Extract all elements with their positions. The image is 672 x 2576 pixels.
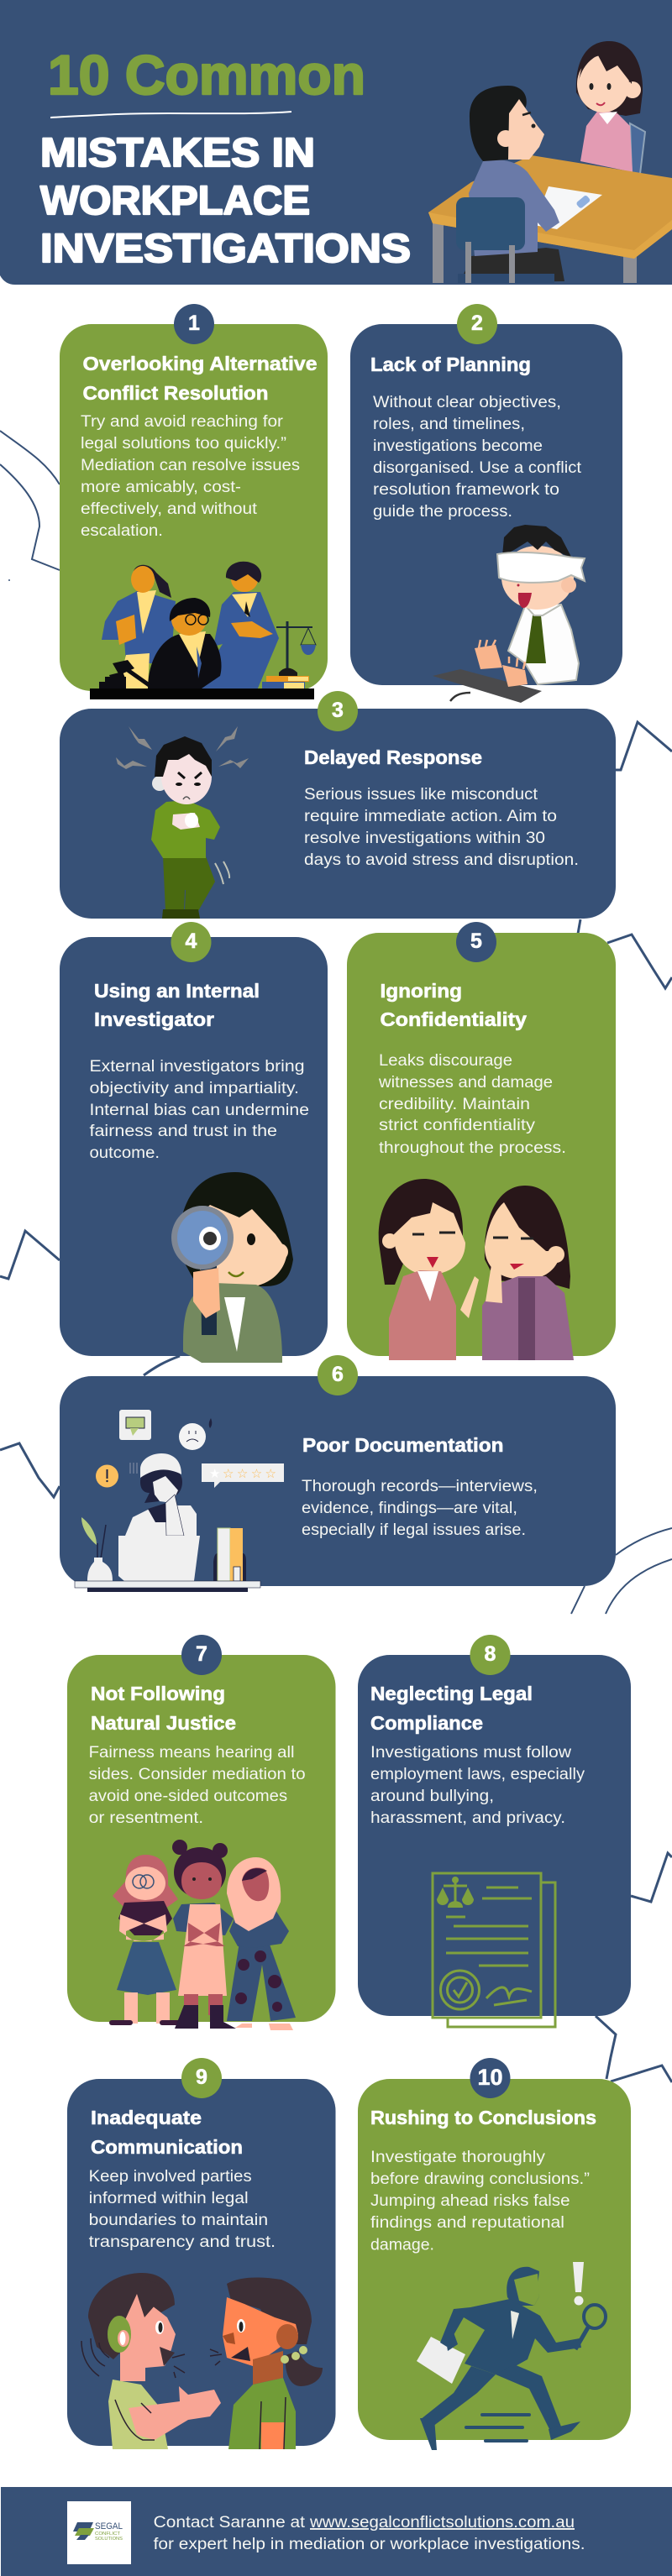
illustration: impatient man checking watch — [116, 726, 249, 919]
number badge 1 — [174, 304, 214, 344]
contact text: Contact Saranne at — [154, 2514, 306, 2531]
icon: warning badge — [96, 1464, 118, 1488]
footer band — [1, 2487, 672, 2576]
card background — [350, 324, 622, 685]
heading: Delayed Response — [304, 746, 482, 768]
number badge 9: 9 — [196, 2066, 207, 2089]
heading: Overlooking Alternative — [82, 353, 318, 374]
heading — [94, 980, 260, 1030]
body text: Thorough records—interviews, — [302, 1478, 538, 1495]
card background — [358, 1655, 631, 2016]
footer background — [1, 2487, 672, 2576]
body text: strict confidentiality — [379, 1117, 536, 1134]
body text: informed within legal — [89, 2190, 249, 2207]
logo: Segal Conflict Solutions: SOLUTIONS — [95, 2537, 123, 2542]
body text: resolution framework to — [373, 481, 559, 499]
body text — [373, 394, 582, 521]
number badge 10 — [470, 2058, 511, 2098]
title: mistakes in workplace investigations — [40, 131, 411, 271]
title: mistakes in workplace investigations: INVESTIGATIONS — [40, 227, 411, 271]
icon: thumbs down — [119, 1410, 151, 1440]
panel: 9 inadequate communication — [67, 2058, 336, 2449]
body text: avoid one-sided outcomes — [89, 1788, 287, 1805]
card background — [60, 937, 328, 1356]
body text: boundaries to maintain — [89, 2212, 268, 2229]
body text: days to avoid stress and disruption. — [304, 851, 579, 869]
heading — [380, 980, 527, 1030]
logo: Segal Conflict Solutions: CONFLICT — [95, 2531, 121, 2537]
body text: Without clear objectives, — [373, 394, 561, 411]
body text: External investigators bring — [89, 1058, 304, 1076]
body text — [304, 786, 579, 869]
number badge 8 — [470, 1635, 511, 1675]
contact text: www.segalconflictsolutions.com.au — [309, 2514, 575, 2531]
body text — [370, 2149, 590, 2254]
heading: Ignoring — [380, 980, 462, 1002]
body text: Investigate thoroughly — [370, 2149, 546, 2166]
number badge 7: 7 — [196, 1642, 207, 1666]
body text: effectively, and without — [81, 500, 258, 518]
number badge 4: 4 — [186, 929, 197, 953]
number badge 9 — [181, 2058, 222, 2098]
body text: roles, and timelines, — [373, 416, 525, 433]
speech bubble: one star rating: ☆☆☆☆ — [223, 1466, 276, 1481]
body text: damage. — [370, 2237, 434, 2254]
heading: Inadequate — [91, 2107, 202, 2128]
title: 10 Common: 10 Common — [48, 44, 365, 106]
body text: Investigations must follow — [370, 1744, 571, 1762]
number badge 5: 5 — [470, 929, 482, 953]
body text — [302, 1478, 538, 1539]
illustration: three women with crossed arms — [109, 1840, 296, 2030]
body text: disorganised. Use a conflict — [373, 459, 582, 477]
number badge 6 — [318, 1355, 358, 1395]
panel: 4 using an internal investigator — [60, 922, 328, 1363]
body text: fairness and trust in the — [89, 1123, 277, 1140]
heading: Lack of Planning — [370, 353, 531, 375]
body text: Leaks discourage — [379, 1052, 512, 1070]
illustration: blindfolded man typing — [433, 525, 585, 703]
body text — [89, 2168, 276, 2251]
body text: escalation. — [81, 522, 163, 540]
body text: Serious issues like misconduct — [304, 786, 538, 804]
number badge 10: 10 — [477, 2065, 503, 2090]
heading: Using an Internal — [94, 980, 260, 1002]
body text: resolve investigations within 30 — [304, 830, 545, 847]
body text: Keep involved parties — [89, 2168, 252, 2186]
panel: 5 ignoring confidentiality — [347, 922, 616, 1360]
body text — [89, 1058, 309, 1162]
number badge 2 — [457, 304, 497, 344]
panel: 6 poor documentation — [60, 1355, 616, 1592]
title: mistakes in workplace investigations: WORKPLACE — [40, 179, 310, 223]
heading: Communication — [91, 2136, 243, 2158]
body text: Internal bias can undermine — [89, 1102, 309, 1119]
contact text — [154, 2514, 585, 2553]
body text: around bullying, — [370, 1788, 494, 1805]
illustration: woman with magnifying glass — [171, 1172, 293, 1363]
speech bubble: one star rating — [202, 1463, 284, 1488]
body text: credibility. Maintain — [379, 1096, 530, 1113]
heading — [91, 2107, 243, 2158]
heading: Not Following — [91, 1683, 225, 1704]
speech bubble: one star rating: ★ — [209, 1466, 220, 1481]
body text: require immediate action. Aim to — [304, 808, 557, 825]
number badge 4 — [171, 922, 212, 962]
number badge 5 — [456, 922, 496, 962]
panel: 1 overlooking alternative conflict resolution — [60, 304, 328, 699]
heading: Conflict Resolution — [82, 382, 269, 404]
number badge 2: 2 — [471, 312, 483, 335]
illustration: two people meeting at a desk — [428, 41, 672, 283]
number badge 6: 6 — [332, 1363, 344, 1386]
body text: Mediation can resolve issues — [81, 457, 300, 474]
heading: Natural Justice — [91, 1712, 236, 1734]
body text: more amicably, cost- — [81, 479, 241, 496]
number badge 1: 1 — [188, 312, 200, 335]
illustration: two children talking — [81, 2273, 323, 2449]
heading — [91, 1683, 236, 1734]
number badge 3 — [318, 691, 358, 731]
body text: outcome. — [89, 1144, 160, 1162]
heading: Neglecting Legal — [370, 1683, 533, 1704]
body text: before drawing conclusions.” — [370, 2170, 590, 2188]
panel: 2 lack of planning — [350, 304, 622, 703]
panel: 3 delayed response — [60, 691, 616, 919]
illustration: frustrated person at laptop — [75, 1410, 284, 1592]
card background — [67, 1655, 336, 2022]
heading: Investigator — [94, 1008, 214, 1030]
body text: investigations become — [373, 437, 543, 455]
card background — [60, 324, 328, 691]
panel: 7 not following natural justice — [67, 1635, 336, 2030]
icon: sad face — [179, 1418, 212, 1450]
body text: sides. Consider mediation to — [89, 1766, 306, 1783]
header banner — [0, 0, 672, 285]
body text: harassment, and privacy. — [370, 1809, 565, 1827]
illustration: two women whispering — [379, 1179, 574, 1360]
illustration: businessman running with magnifier — [417, 2262, 606, 2450]
number badge 3: 3 — [332, 699, 344, 722]
heading — [370, 1683, 533, 1734]
number badge 8: 8 — [485, 1642, 496, 1666]
body text: transparency and trust. — [89, 2233, 276, 2251]
body text: findings and reputational — [370, 2214, 564, 2232]
body text: employment laws, especially — [370, 1766, 585, 1783]
number badge 7 — [181, 1635, 222, 1675]
body text — [81, 413, 300, 540]
title underline — [50, 112, 291, 118]
illustration: legal team with gavel and scales — [90, 562, 316, 699]
panel: 8 neglecting legal compliance — [358, 1635, 631, 2027]
contact text: for expert help in mediation or workplace investigations. — [154, 2536, 585, 2553]
body text: or resentment. — [89, 1809, 203, 1827]
body text — [378, 1052, 566, 1157]
body text: Jumping ahead risks false — [370, 2192, 570, 2210]
icon: legal document with seal — [433, 1873, 555, 2027]
body text: witnesses and damage — [378, 1074, 553, 1092]
heading: Poor Documentation — [302, 1434, 504, 1456]
card background — [60, 1376, 616, 1586]
body text: Fairness means hearing all — [89, 1744, 295, 1762]
heading: Compliance — [370, 1712, 483, 1734]
panel: 10 rushing to conclusions — [358, 2058, 631, 2450]
card background — [67, 2079, 336, 2446]
logo: Segal Conflict Solutions: SEGAL — [95, 2521, 123, 2531]
heading: Rushing to Conclusions — [370, 2107, 596, 2128]
body text: legal solutions too quickly.” — [81, 435, 286, 453]
body text: guide the process. — [373, 503, 512, 521]
heading — [82, 353, 318, 404]
card background — [347, 933, 616, 1356]
body text: throughout the process. — [379, 1139, 566, 1157]
logo: Segal Conflict Solutions — [67, 2501, 131, 2564]
header background — [0, 0, 672, 285]
body text: objectivity and impartiality. — [89, 1080, 299, 1097]
card background — [358, 2079, 631, 2440]
heading: Confidentiality — [380, 1008, 527, 1030]
title: mistakes in workplace investigations: MISTAKES IN — [40, 131, 315, 175]
card background — [60, 709, 616, 919]
body text — [370, 1744, 585, 1827]
body text: evidence, findings—are vital, — [302, 1500, 517, 1517]
body text — [89, 1744, 306, 1827]
body text: Try and avoid reaching for — [81, 413, 284, 431]
body text: especially if legal issues arise. — [302, 1521, 526, 1539]
